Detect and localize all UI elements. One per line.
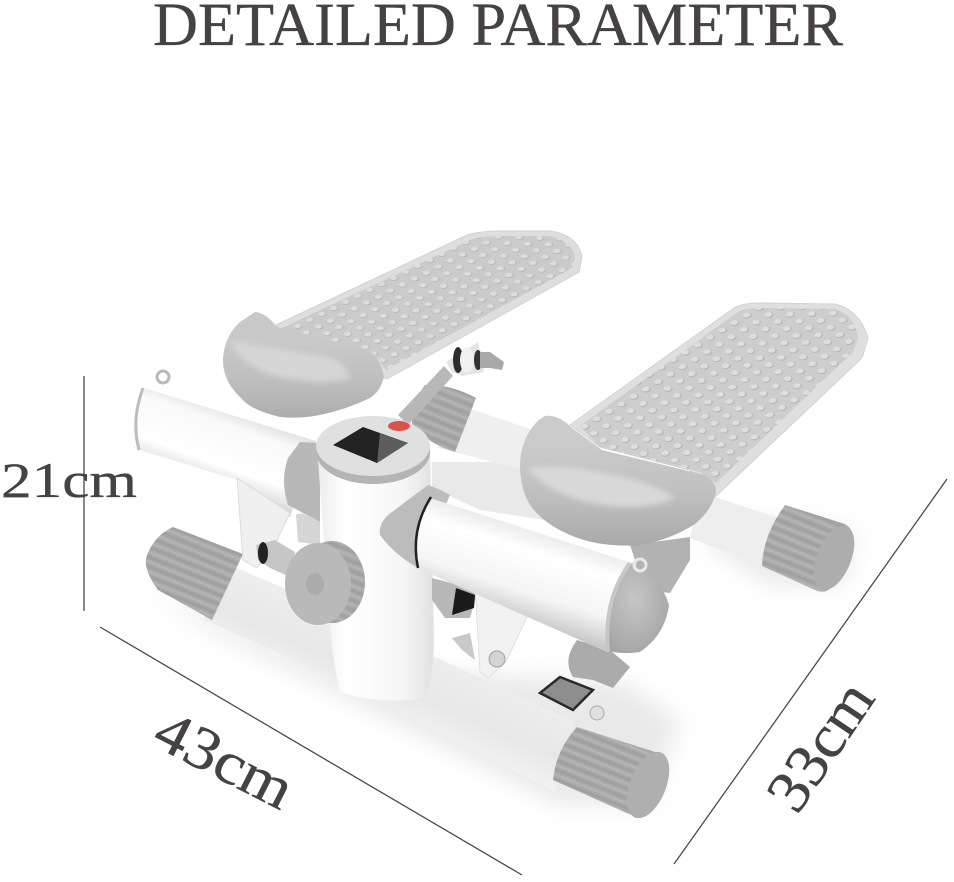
pedal bracket and bolt [446, 342, 504, 376]
screen [333, 427, 408, 463]
rear cross strut [432, 462, 545, 520]
dark spring gap [452, 588, 475, 615]
floor shadow [150, 520, 855, 805]
dimension: depth [674, 479, 947, 864]
small bolt [452, 633, 475, 660]
label: 21cm: 21cm [1, 452, 137, 508]
label: 33cm: 33cm [753, 669, 887, 823]
left connector [284, 442, 320, 522]
rear right foot tube [690, 492, 862, 596]
front foot tube [146, 527, 678, 824]
icon: rear right foot cap [762, 505, 862, 596]
icon: rear left knurled collar [412, 385, 476, 452]
front pedal [570, 303, 868, 497]
left bracket [237, 478, 290, 568]
right heel cushion [520, 416, 716, 546]
mat: back pedal studs [282, 236, 575, 370]
back pedal [276, 231, 582, 379]
mounting loop [634, 559, 646, 571]
central column [316, 416, 434, 700]
adjustment knob [285, 541, 365, 625]
end ring [136, 388, 143, 450]
mounting loop [157, 371, 169, 383]
rear left tube [412, 385, 545, 470]
dimension: width [100, 627, 522, 875]
icon: front right foot cap [553, 727, 678, 824]
red button [388, 421, 410, 431]
right bracket [452, 585, 532, 678]
lower right damper [540, 537, 690, 720]
display head [316, 416, 430, 484]
icon: front left foot cap [146, 527, 243, 620]
end dome [606, 563, 669, 653]
end ring [607, 563, 630, 652]
left heel cushion [223, 312, 384, 418]
label: 43cm: 43cm [144, 697, 305, 822]
top left tube [136, 371, 320, 522]
right connector [380, 485, 450, 568]
rear lower arm [432, 578, 478, 618]
left spring bolt [256, 514, 320, 577]
front right tube [416, 497, 669, 653]
hydraulic rod [398, 366, 453, 425]
mat: front pedal studs [580, 308, 858, 483]
